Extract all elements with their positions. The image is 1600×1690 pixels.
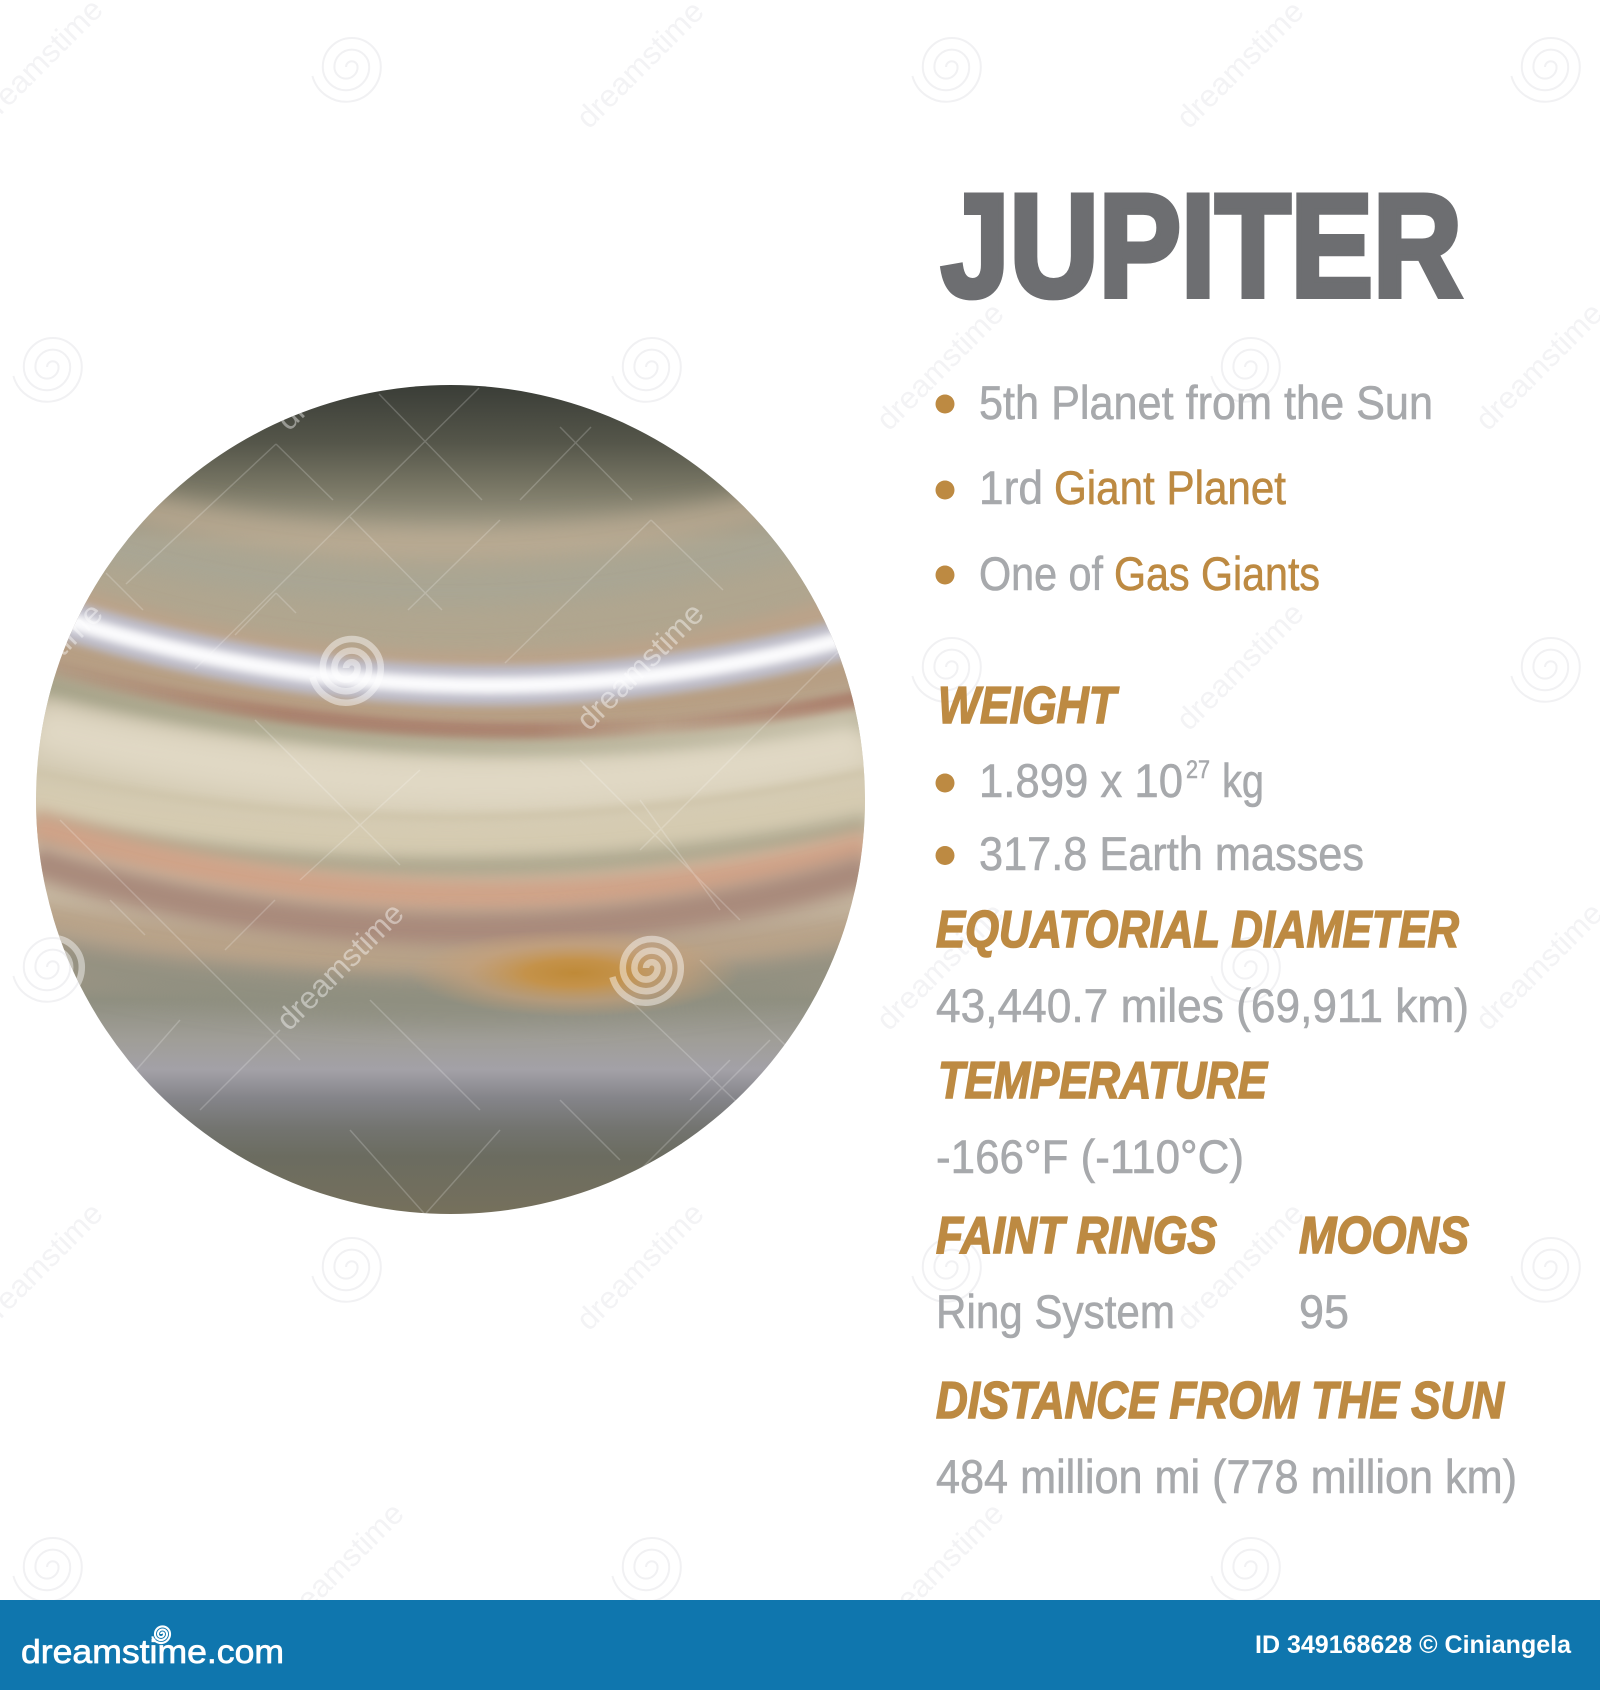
- section: faint rings: [936, 1207, 1217, 1338]
- rings value: Ring System: [936, 1285, 1175, 1338]
- bullet: weight in kg: 27: [1186, 756, 1210, 784]
- watermark pattern: faint: dreamstime: [1169, 596, 1311, 737]
- text watermarks on planet: [0, 296, 711, 1037]
- temperature value: -166°F (-110°C): [936, 1130, 1244, 1183]
- bullet: giant planet: Giant Planet: [1054, 461, 1286, 514]
- watermark lattice on planet: [60, 388, 860, 1220]
- section: weight: [936, 677, 1364, 880]
- watermark pattern: faint: dreamstime: [1169, 1196, 1311, 1337]
- heading: temperature: TEMPERATURE: [938, 1052, 1268, 1110]
- watermark pattern: faint: dreamstime: [569, 1196, 711, 1337]
- heading: moons: MOONS: [1299, 1207, 1469, 1265]
- bullet: gas giants: One of: [979, 547, 1104, 600]
- bullet: gas giants: [936, 547, 1320, 600]
- watermark pattern: faint: dreamstime: [869, 1496, 1011, 1637]
- section: distance from the sun: [936, 1372, 1517, 1503]
- text watermarks on planet: dreamstime: [569, 596, 711, 737]
- bullet: earth masses: 317.8 Earth masses: [979, 827, 1364, 880]
- great red spot: [430, 936, 724, 1014]
- spiral watermarks on planet: [13, 639, 681, 1003]
- watermark pattern: faint: dreamstime: [869, 896, 1011, 1037]
- footer logo: dreamstime.com: [21, 1633, 284, 1670]
- distance value: 484 million mi (778 million km): [936, 1450, 1517, 1503]
- footer credit: ID 349168628 © Ciniangela: [1255, 1631, 1572, 1659]
- watermark pattern: faint: dreamstime: [269, 1496, 411, 1637]
- bullet: gas giants: Gas Giants: [1114, 547, 1320, 600]
- watermark pattern: faint: dreamstime: [869, 296, 1011, 437]
- text watermarks on planet: dreamstime: [269, 896, 411, 1037]
- title: JUPITER: [941, 164, 1462, 327]
- planet: Jupiter disc: [36, 385, 865, 1214]
- bullet: weight in kg: 1.899 x 10: [979, 754, 1183, 807]
- section: moons: [1299, 1207, 1469, 1338]
- intro bullet list: [936, 376, 1433, 600]
- footer bar: [0, 1600, 1600, 1690]
- bullet: weight in kg: kg: [1222, 754, 1264, 807]
- heading: equatorial diameter: EQUATORIAL DIAMETER: [936, 901, 1459, 959]
- diameter value: 43,440.7 miles (69,911 km): [936, 979, 1469, 1032]
- heading: distance from the sun: DISTANCE FROM THE SUN: [936, 1372, 1505, 1430]
- section: temperature: [936, 1052, 1268, 1183]
- bullet: giant planet: [936, 461, 1286, 514]
- bullet: weight in kg: [936, 754, 1264, 807]
- moons value: 95: [1299, 1285, 1349, 1338]
- heading: weight: WEIGHT: [938, 677, 1120, 735]
- bullet: giant planet: 1rd: [979, 461, 1043, 514]
- heading: faint rings: FAINT RINGS: [936, 1207, 1217, 1265]
- bullet: 5th planet: 5th Planet from the Sun: [979, 376, 1433, 429]
- section: equatorial diameter: [936, 901, 1469, 1032]
- text watermarks on planet: dreamstime: [269, 296, 411, 437]
